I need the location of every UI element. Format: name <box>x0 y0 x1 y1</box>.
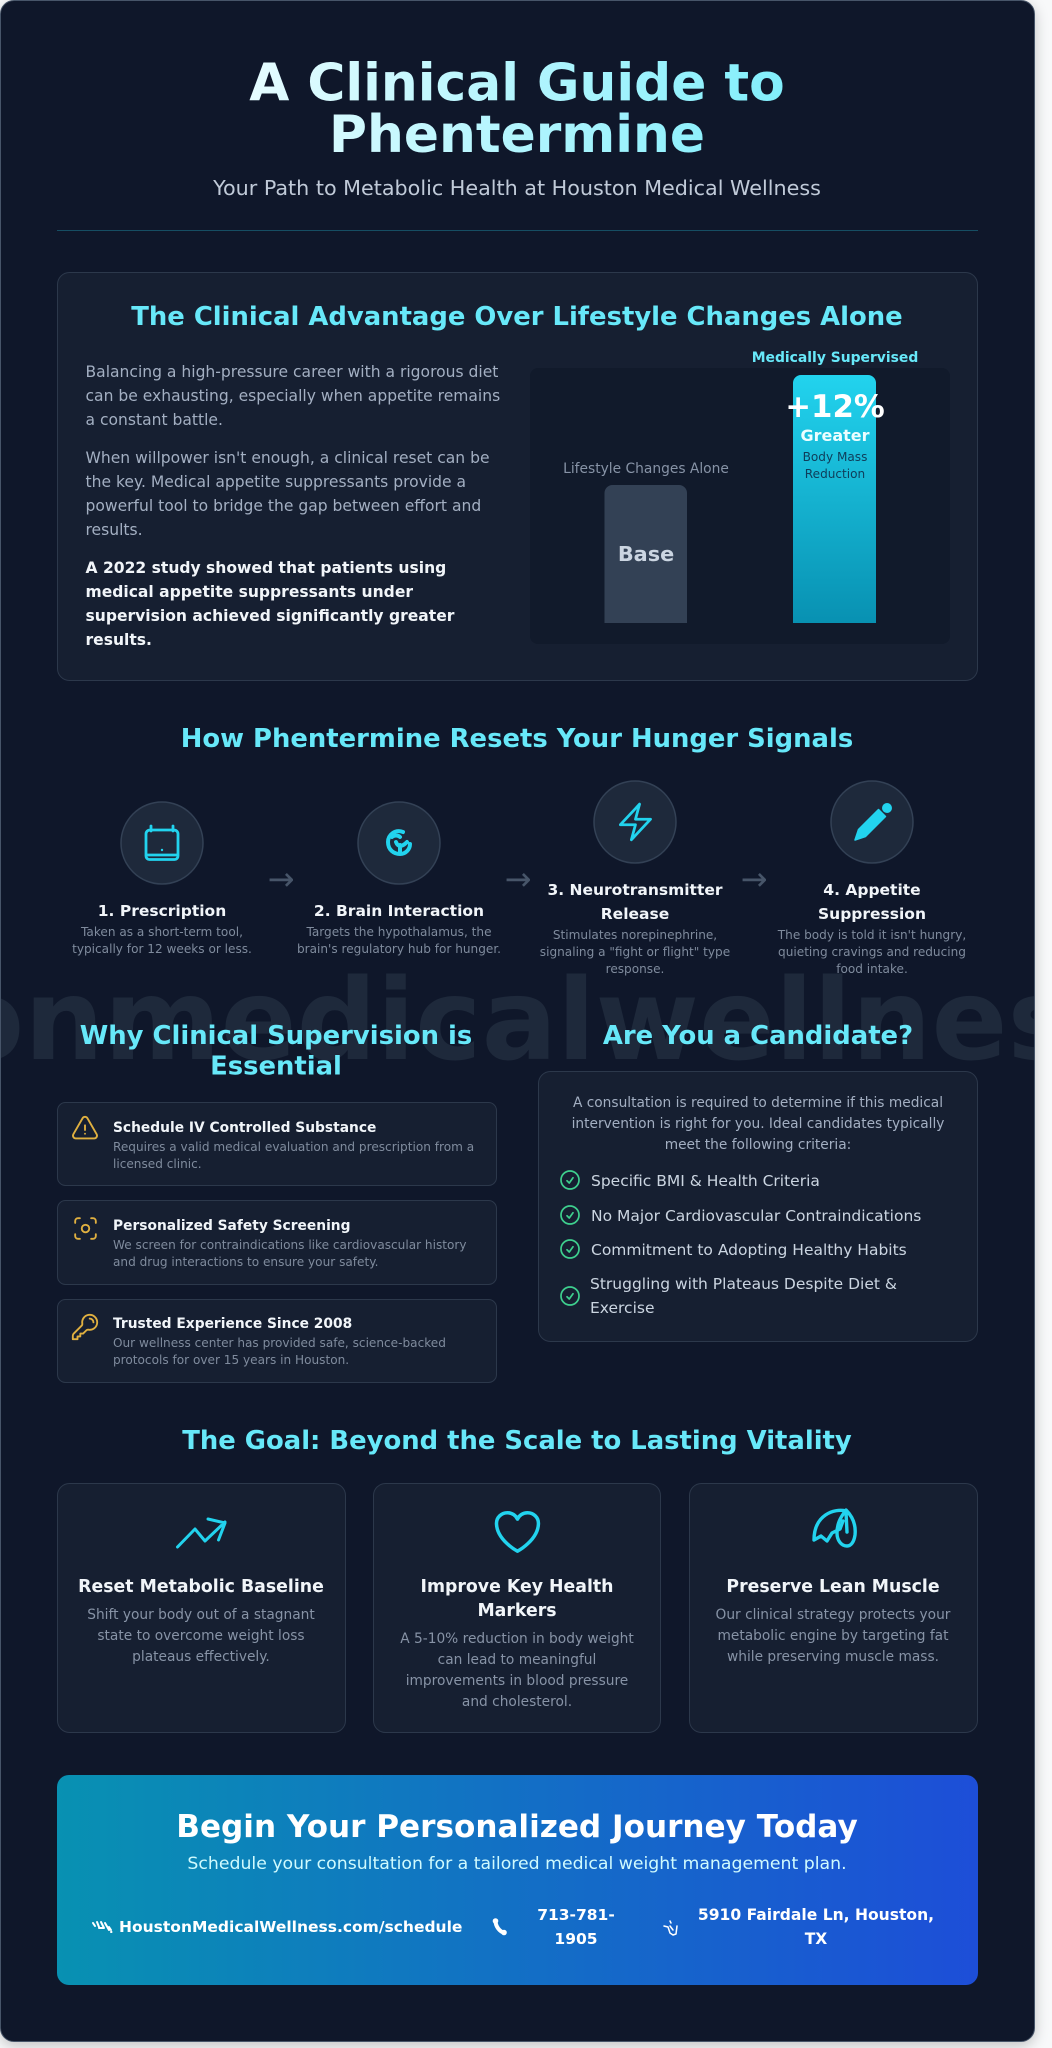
body text: results. <box>86 631 152 649</box>
contact: website: HoustonMedicalWellness.com/schedule <box>119 1918 462 1936</box>
body text: When willpower isn't enough, a clinical reset can be <box>86 449 490 467</box>
step 2: brain's regulatory hub for hunger. <box>297 942 501 956</box>
step 2: 2. Brain Interaction <box>314 902 484 920</box>
call to action banner <box>57 1775 978 1985</box>
icon: pencil <box>831 781 913 863</box>
goal card: health markers: Improve Key Health <box>421 1577 613 1597</box>
title: A Clinical Guide to <box>249 54 785 114</box>
bar: base <box>604 485 687 623</box>
icon: viewfinder <box>75 1218 96 1239</box>
icon: brain <box>358 802 440 884</box>
intro text: A consultation is required to determine if this medical <box>573 1095 943 1111</box>
bar: base: Base <box>618 542 674 566</box>
step 2 <box>297 802 501 956</box>
step 1: typically for 12 weeks or less. <box>72 942 252 956</box>
step 3 <box>540 781 730 976</box>
body text: can be exhausting, especially when appetite remains <box>86 387 500 405</box>
criterion: plateaus: Exercise <box>590 1299 654 1317</box>
bar chart: Medically Supervised <box>752 350 918 366</box>
contact: phone: 1905 <box>554 1930 598 1948</box>
step 4: food intake. <box>836 962 908 976</box>
card: trusted experience: protocols for over 15 years in Houston. <box>113 1353 349 1367</box>
goal card: metabolic: state to overcome weight loss <box>97 1628 305 1644</box>
goal card: metabolic: Shift your body out of a stagnant <box>87 1607 315 1623</box>
intro text: meet the following criteria: <box>665 1137 851 1153</box>
arrow: → <box>268 860 294 898</box>
bar: medically supervised: Body Mass <box>803 450 867 464</box>
title: Phentermine <box>329 105 705 165</box>
goal card: health markers: improvements in blood pressure <box>406 1673 628 1689</box>
card: safety screening: and drug interactions to ensure your safety. <box>113 1255 378 1269</box>
goal card: lean muscle: metabolic engine by targeting fat <box>718 1628 949 1644</box>
icon: bolt <box>594 781 676 863</box>
goal card: lean muscle <box>690 1484 978 1732</box>
step 1: 1. Prescription <box>98 902 226 920</box>
criterion: cardiovascular: No Major Cardiovascular Contraindications <box>591 1207 921 1225</box>
panel: candidate criteria <box>538 1072 978 1342</box>
subtitle: Your Path to Metabolic Health at Houston Medical Wellness <box>212 176 821 200</box>
goal card: health markers: A 5-10% reduction in body weight <box>400 1631 634 1647</box>
body text: powerful tool to bridge the gap between effort and <box>86 497 481 515</box>
body text: results. <box>86 521 143 539</box>
card: trusted experience: Trusted Experience Since 2008 <box>113 1316 352 1332</box>
panel heading: The Clinical Advantage Over Lifestyle Changes Alone <box>131 302 903 332</box>
goal card: health markers: can lead to meaningful <box>438 1652 596 1668</box>
card: schedule IV: Requires a valid medical evaluation and prescription from a <box>113 1140 474 1154</box>
step 1: Taken as a short-term tool, <box>80 925 243 939</box>
bar chart: Lifestyle Changes Alone <box>563 461 729 477</box>
intro text: intervention is right for you. Ideal candidates typically <box>572 1116 944 1132</box>
bar chart <box>530 350 950 644</box>
goal card: metabolic: Reset Metabolic Baseline <box>78 1577 324 1597</box>
step 4: 4. Appetite <box>823 881 921 899</box>
step 2: Targets the hypothalamus, the <box>305 925 492 939</box>
body text: supervision achieved significantly greater <box>86 607 455 625</box>
body text: medical appetite suppressants under <box>86 583 413 601</box>
card: trusted experience: Our wellness center has provided safe, science-backed <box>113 1336 446 1350</box>
arrow: → <box>505 860 531 898</box>
goal card: health markers <box>374 1484 660 1732</box>
contact: phone: 713-781- <box>537 1906 615 1924</box>
bar: medically supervised: +12% <box>785 389 885 425</box>
body text: the key. Medical appetite suppressants provide a <box>86 473 466 491</box>
criterion: plateaus <box>561 1275 897 1317</box>
icon: muscle <box>814 1510 855 1546</box>
heading: hunger signals: How Phentermine Resets Your Hunger Signals <box>181 724 853 754</box>
icon: heart <box>496 1513 538 1551</box>
heading: the goal: The Goal: Beyond the Scale to Lasting Vitality <box>182 1426 852 1456</box>
goal card: lean muscle: Preserve Lean Muscle <box>726 1577 940 1597</box>
card: schedule IV <box>58 1102 496 1186</box>
step 3: Stimulates norepinephrine, <box>553 928 717 942</box>
contact: address: 5910 Fairdale Ln, Houston, <box>698 1906 934 1924</box>
panel: clinical advantage <box>58 272 978 680</box>
goal card: metabolic <box>58 1484 346 1732</box>
card: safety screening: We screen for contraindications like cardiovascular history <box>113 1238 467 1252</box>
goal card: lean muscle: while preserving muscle mass. <box>727 1649 939 1665</box>
card: schedule IV: licensed clinic. <box>113 1157 202 1171</box>
goal card: health markers: and cholesterol. <box>462 1694 572 1710</box>
icon: warning <box>73 1117 97 1138</box>
call to action banner: Schedule your consultation for a tailored medical weight management plan. <box>187 1854 847 1874</box>
card: safety screening: Personalized Safety Screening <box>113 1218 351 1234</box>
heading: clinical supervision: Essential <box>210 1052 342 1082</box>
criterion: commitment: Commitment to Adopting Healthy Habits <box>591 1241 907 1259</box>
card: trusted experience <box>58 1300 496 1382</box>
step 4: Suppression <box>818 905 926 923</box>
card: schedule IV: Schedule IV Controlled Substance <box>113 1120 376 1136</box>
goal card: health markers: Markers <box>477 1601 557 1621</box>
step 4 <box>777 781 966 976</box>
body text: A 2022 study showed that patients using <box>86 559 446 577</box>
step 1 <box>72 802 252 956</box>
arrow: → <box>741 860 767 898</box>
heading: clinical supervision: Why Clinical Supervision is <box>80 1021 472 1051</box>
contact: phone <box>493 1906 615 1948</box>
bar: medically supervised <box>785 375 885 623</box>
contact: address <box>664 1906 934 1948</box>
intro text <box>572 1095 944 1153</box>
icon: calendar <box>121 802 203 884</box>
goal card: lean muscle: Our clinical strategy protects your <box>716 1607 951 1623</box>
step 3: Release <box>601 905 669 923</box>
icon: key <box>73 1315 97 1339</box>
bar: medically supervised: Greater <box>800 426 870 445</box>
body text: a constant battle. <box>86 411 223 429</box>
goal card: metabolic: plateaus effectively. <box>132 1649 270 1665</box>
criterion: BMI: Specific BMI & Health Criteria <box>591 1172 820 1190</box>
heading: candidate: Are You a Candidate? <box>603 1021 913 1051</box>
step 4: The body is told it isn't hungry, <box>777 928 966 942</box>
heading: clinical supervision <box>80 1021 472 1082</box>
bar: medically supervised: Reduction <box>805 467 865 481</box>
step 3: signaling a "fight or flight" type <box>540 945 730 959</box>
criterion: plateaus: Struggling with Plateaus Despite Diet & <box>590 1275 897 1293</box>
card: safety screening <box>58 1200 496 1284</box>
call to action banner: Begin Your Personalized Journey Today <box>176 1809 858 1845</box>
step 3: 3. Neurotransmitter <box>547 881 723 899</box>
icon: trend up <box>178 1519 225 1547</box>
contact: address: TX <box>805 1930 827 1948</box>
title <box>249 54 785 165</box>
step 3: response. <box>606 962 664 976</box>
body text: Balancing a high-pressure career with a rigorous diet <box>86 363 498 381</box>
step 4: quieting cravings and reducing <box>778 945 966 959</box>
body text <box>86 363 500 649</box>
